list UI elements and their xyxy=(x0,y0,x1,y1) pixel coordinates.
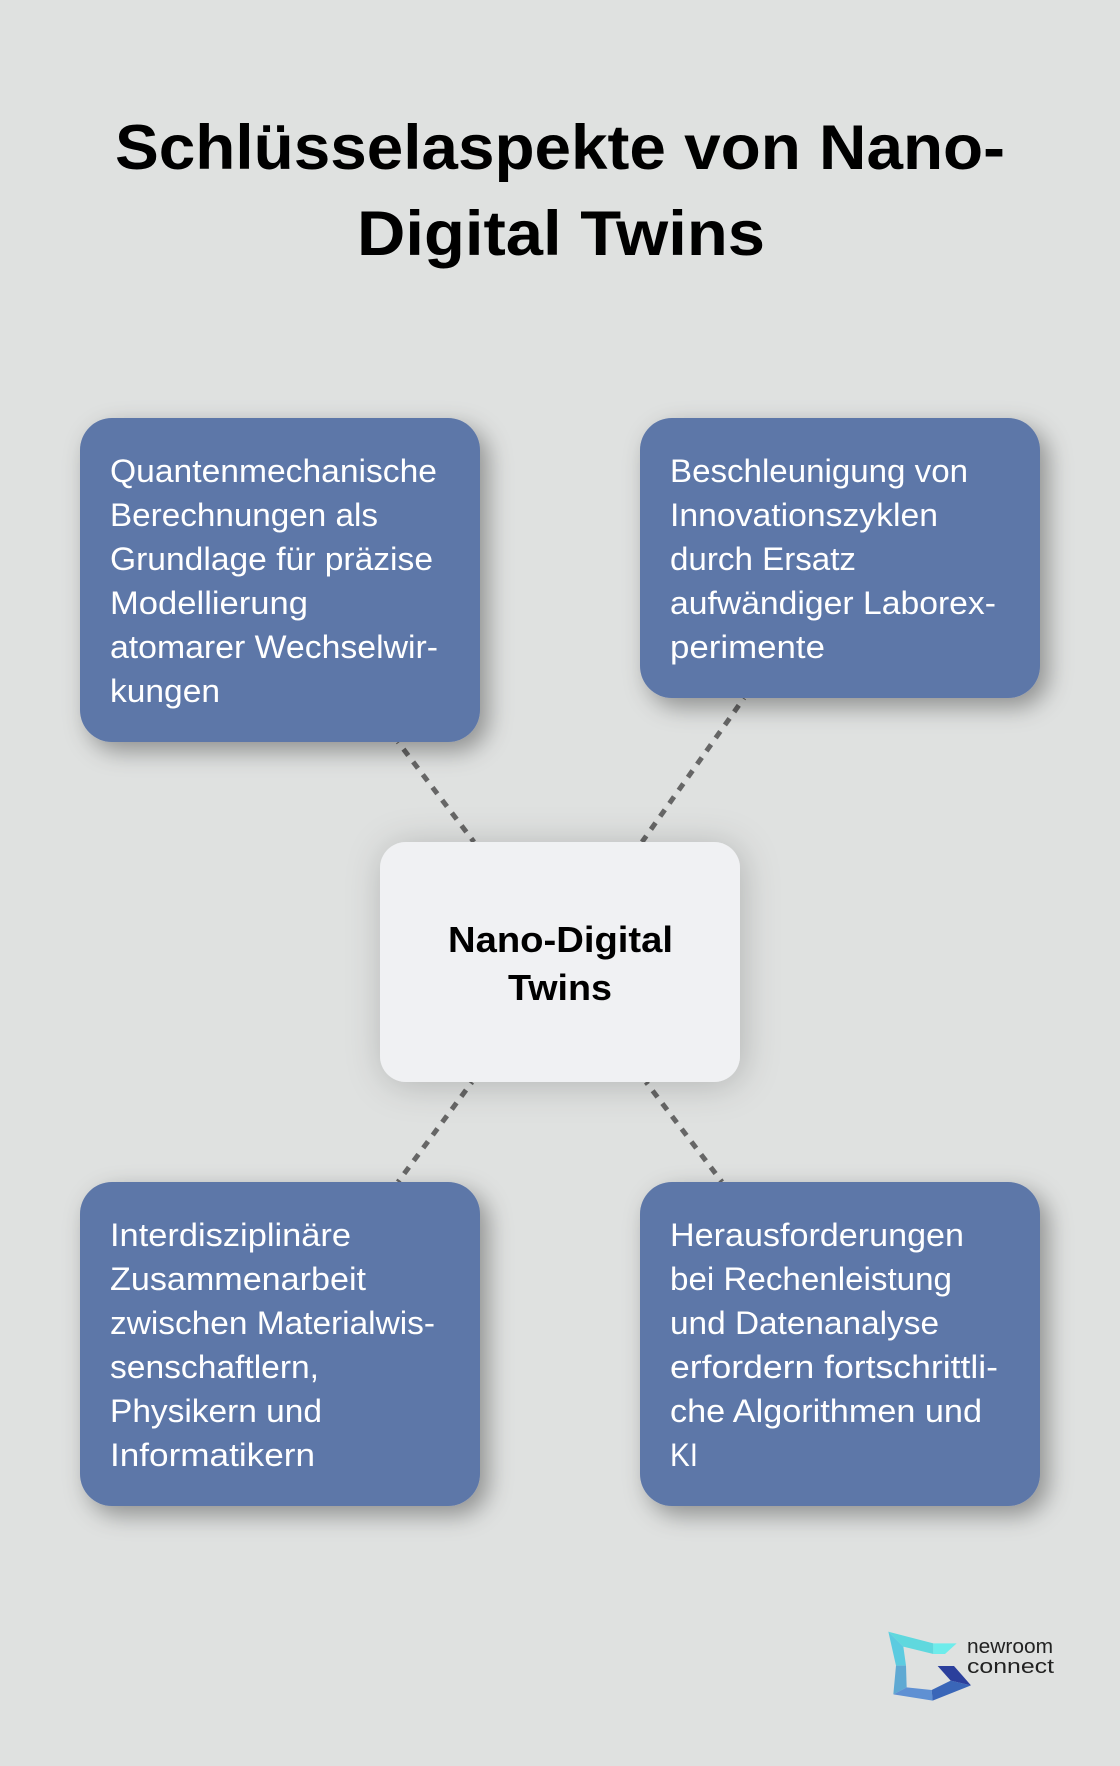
logo: newroom connect xyxy=(888,1632,1055,1701)
card text: zwischen Materialwis- xyxy=(110,1305,435,1341)
card background xyxy=(640,418,1040,698)
title xyxy=(115,113,1005,269)
title: Schlüsselaspekte von Nano- xyxy=(115,113,1005,183)
card text: Innovationszyklen xyxy=(670,497,938,533)
logo mark xyxy=(888,1632,971,1701)
card text: atomarer Wechselwir- xyxy=(110,629,438,665)
logo wordmark: newroom xyxy=(967,1636,1053,1658)
card text xyxy=(110,453,438,709)
title: Digital Twins xyxy=(357,199,765,269)
connector: bottom left xyxy=(398,1082,472,1182)
card text: und Datenanalyse xyxy=(670,1305,939,1341)
card text: Modellierung xyxy=(110,585,308,621)
logo wordmark xyxy=(967,1636,1055,1678)
card background xyxy=(80,1182,480,1506)
card background xyxy=(640,1182,1040,1506)
connector: top right xyxy=(642,698,744,842)
panel: innovation cycles xyxy=(640,418,1040,698)
card text: KI xyxy=(670,1437,698,1473)
card text: Quantenmechanische xyxy=(110,453,437,489)
card text xyxy=(110,1217,435,1473)
card text: Berechnungen als xyxy=(110,497,378,533)
card text: Informatikern xyxy=(110,1437,315,1473)
card text: kungen xyxy=(110,673,220,709)
card text: durch Ersatz xyxy=(670,541,856,577)
card text xyxy=(670,1217,998,1473)
connector: top left xyxy=(398,742,474,842)
logo wordmark: connect xyxy=(967,1656,1055,1678)
centre background xyxy=(380,842,740,1082)
card text: Grundlage für präzise xyxy=(110,541,433,577)
centre text xyxy=(448,919,673,1008)
card text: Beschleunigung von xyxy=(670,453,968,489)
panel: interdisciplinary collaboration xyxy=(80,1182,480,1506)
card text: bei Rechenleistung xyxy=(670,1261,952,1297)
card text: perimente xyxy=(670,629,825,665)
centre text: Nano-Digital xyxy=(448,919,673,960)
card text xyxy=(670,453,996,665)
card text: che Algorithmen und xyxy=(670,1393,982,1429)
card text: Physikern und xyxy=(110,1393,322,1429)
card text: Zusammenarbeit xyxy=(110,1261,366,1297)
card text: senschaftlern, xyxy=(110,1349,319,1385)
card text: Interdisziplinäre xyxy=(110,1217,351,1253)
card text: erfordern fortschrittli- xyxy=(670,1349,998,1385)
connector: bottom right xyxy=(646,1082,722,1182)
centre text: Twins xyxy=(508,967,612,1008)
panel: quantum calculations xyxy=(80,418,480,742)
panel: centre node xyxy=(380,842,740,1082)
card text: Herausforderungen xyxy=(670,1217,964,1253)
panel: challenges xyxy=(640,1182,1040,1506)
card text: aufwändiger Laborex- xyxy=(670,585,996,621)
card background xyxy=(80,418,480,742)
